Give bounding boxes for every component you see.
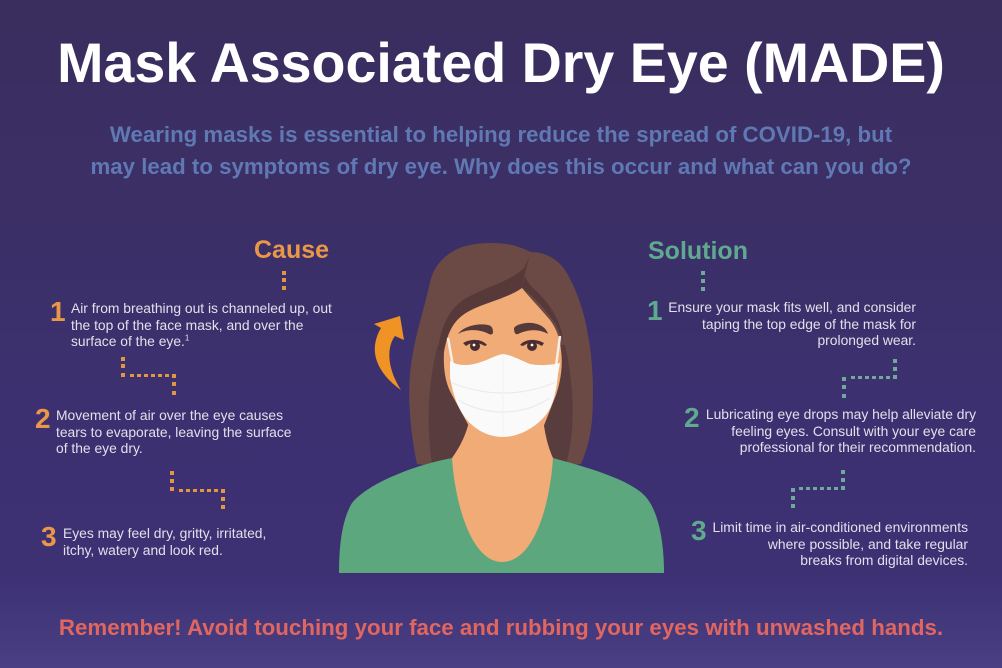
cause text 3: Eyes may feel dry, gritty, irritated, bbox=[63, 525, 266, 541]
hair bbox=[409, 243, 593, 475]
cause text 2 bbox=[56, 407, 292, 456]
title: Mask Associated Dry Eye (MADE) bbox=[57, 32, 945, 94]
solution text 3: Limit time in air-conditioned environments bbox=[713, 519, 968, 535]
reminder: Remember! Avoid touching your face and rubbing your eyes with unwashed hands. bbox=[59, 615, 943, 640]
connector dots: solution bbox=[701, 271, 897, 508]
solution text 1 bbox=[668, 299, 916, 348]
cause text 2: of the eye dry. bbox=[56, 440, 143, 456]
solution text 2: feeling eyes. Consult with your eye care bbox=[731, 423, 976, 439]
cause text 2: Movement of air over the eye causes bbox=[56, 407, 283, 423]
arrow: air flowing up bbox=[374, 316, 404, 390]
cause text 1: surface of the eye.1 bbox=[71, 333, 189, 349]
cause text 3 bbox=[63, 525, 266, 558]
cause text 3: itchy, watery and look red. bbox=[63, 542, 223, 558]
eyes bbox=[463, 340, 544, 351]
solution text 3: breaks from digital devices. bbox=[800, 552, 968, 568]
solution number 1: 1 bbox=[647, 295, 663, 326]
heading: cause: Cause bbox=[254, 236, 329, 264]
connector dots: cause bbox=[121, 271, 286, 509]
solution number 2: 2 bbox=[684, 402, 700, 433]
subtitle: Wearing masks is essential to helping reduce the spread of COVID-19, but bbox=[110, 122, 892, 147]
heading: solution: Solution bbox=[648, 237, 748, 265]
subtitle bbox=[91, 122, 911, 179]
shirt bbox=[339, 458, 664, 573]
solution text 2: Lubricating eye drops may help alleviate dry bbox=[706, 406, 976, 422]
cause text 1 bbox=[71, 300, 332, 349]
solution text 3 bbox=[713, 519, 968, 568]
mask bbox=[448, 336, 560, 437]
eyebrows bbox=[458, 323, 548, 334]
solution text 1: taping the top edge of the mask for bbox=[702, 316, 916, 332]
solution text 2: professional for their recommendation. bbox=[740, 439, 976, 455]
solution number 3: 3 bbox=[691, 515, 707, 546]
cause number 3: 3 bbox=[41, 521, 57, 552]
neck bbox=[452, 415, 553, 562]
subtitle: may lead to symptoms of dry eye. Why does this occur and what can you do? bbox=[91, 154, 911, 179]
cause number 2: 2 bbox=[35, 403, 51, 434]
solution text 1: Ensure your mask fits well, and consider bbox=[668, 299, 916, 315]
solution text 2 bbox=[706, 406, 976, 455]
cause text 1: the top of the face mask, and over the bbox=[71, 317, 303, 333]
solution text 3: where possible, and take regular bbox=[768, 536, 968, 552]
cause text 1: Air from breathing out is channeled up, out bbox=[71, 300, 332, 316]
cause number 1: 1 bbox=[50, 296, 66, 327]
cause text 2: tears to evaporate, leaving the surface bbox=[56, 424, 292, 440]
face bbox=[444, 288, 562, 428]
solution text 1: prolonged wear. bbox=[817, 332, 916, 348]
